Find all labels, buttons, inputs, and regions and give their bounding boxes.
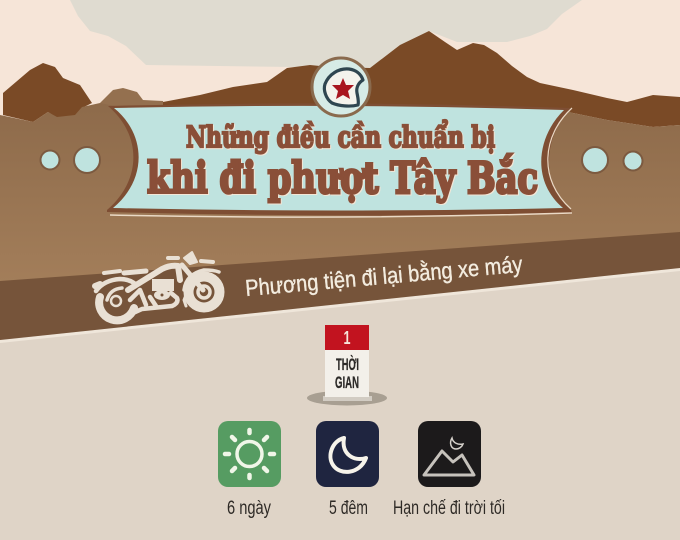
title line 2: khi đi phượt Tây Bắc — [147, 154, 538, 204]
seat and trim — [104, 258, 213, 273]
ribbon caption: Phương tiện đi lại bằng xe máy — [244, 251, 524, 301]
calendar label: GIAN — [335, 373, 359, 392]
right rivets — [582, 147, 642, 173]
calendar label — [335, 355, 359, 392]
label: 6 days: 6 ngày — [227, 498, 271, 519]
title line 1: Những điều cần chuẩn bị — [186, 118, 495, 154]
helmet badge — [312, 58, 370, 116]
banner — [107, 103, 572, 217]
label: 5 nights: 5 đêm — [329, 498, 368, 519]
icon: sun — [218, 421, 281, 487]
mountains — [3, 31, 680, 127]
icon: moon — [316, 421, 379, 487]
icon: red star — [332, 78, 354, 99]
frame and tank — [128, 266, 180, 290]
front wheel — [184, 270, 220, 308]
ribbon band — [0, 232, 680, 343]
icon: motorcycle — [95, 252, 220, 320]
left rivets — [40, 147, 100, 173]
icon: mountain at night — [418, 421, 481, 487]
label: limit night travel: Hạn chế đi trời tối — [393, 498, 505, 519]
calendar marker — [307, 325, 387, 406]
engine — [130, 290, 146, 305]
title — [147, 118, 538, 204]
rear wheel — [95, 279, 134, 320]
calendar label: THỜI — [336, 355, 359, 374]
brown ground — [0, 103, 680, 285]
calendar number: 1 — [344, 328, 350, 348]
exhaust — [122, 293, 177, 318]
